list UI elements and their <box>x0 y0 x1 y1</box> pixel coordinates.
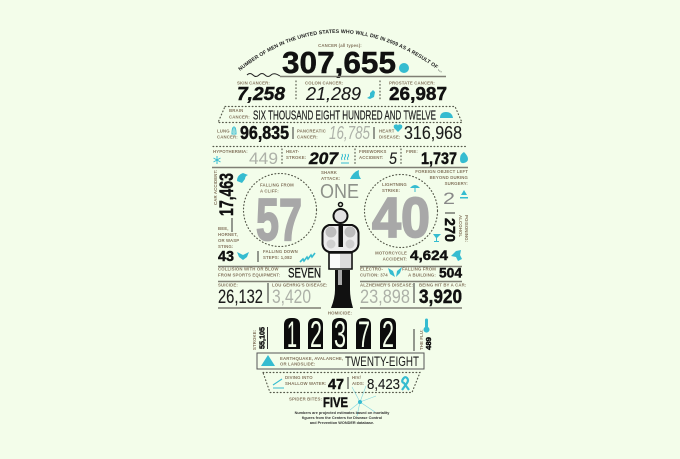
hypothermia, heat-stroke, fireworks, fire row: STROKE: <box>286 155 307 160</box>
suicide and Lou Gehrig's <box>218 282 328 308</box>
electrocution and falling from a building: ELECTRO- <box>360 266 384 272</box>
earthquake panel: TWENTY-EIGHT <box>345 353 419 369</box>
lung, pancreatic, heart row: 96,835 <box>240 123 289 143</box>
cancer types row: 21,289 <box>305 84 361 104</box>
lung, pancreatic, heart row: CANCER: <box>217 134 238 140</box>
foreign object left during surgery: FOREIGN OBJECT LEFT <box>415 169 468 174</box>
hypothermia, heat-stroke, fireworks, fire row: ACCIDENT: <box>359 155 384 160</box>
circle: lightning strike: 40 <box>372 186 430 250</box>
car accident <box>213 169 248 232</box>
alcohol poisoning: POISONING: <box>464 215 469 243</box>
foreign object left during surgery: BEYOND DURING <box>430 175 469 180</box>
source note: figures from the Centers for Disease Control <box>302 416 382 420</box>
cancer total: CANCER (all types): <box>318 43 362 48</box>
lung, pancreatic, heart row <box>213 123 467 146</box>
spider bites: FIVE <box>323 395 348 410</box>
hypothermia, heat-stroke, fireworks, fire row: 449 <box>249 149 278 168</box>
lung, pancreatic, heart row: 16,785 <box>329 123 371 143</box>
alcohol poisoning <box>433 213 469 243</box>
stroke: 55,105 <box>258 327 266 349</box>
circle: falling from a cliff: FALLING FROM <box>260 182 294 188</box>
motorcycle accident: ACCIDENT: <box>383 256 407 262</box>
source note: and Prevention WONDER database. <box>310 421 374 425</box>
lung, pancreatic, heart row: 316,968 <box>404 123 462 143</box>
foreign object left during surgery: SURGERY: <box>445 181 468 186</box>
cancer types row: PROSTATE CANCER: <box>389 80 435 86</box>
lung, pancreatic, heart row: PANCREATIC <box>297 128 326 134</box>
suicide and Lou Gehrig's: 3,420 <box>272 287 311 308</box>
diving, HIV band: DIVING INTO <box>285 375 313 380</box>
revolver <box>322 202 358 308</box>
circle: lightning strike: LIGHTNING <box>382 182 407 187</box>
cancer total <box>247 43 446 80</box>
source note: Numbers are projected estimates based on mortality <box>295 411 390 415</box>
the flu: THE FLU: <box>419 329 424 350</box>
hypothermia, heat-stroke, fireworks, fire row <box>212 149 468 168</box>
source note <box>295 411 390 425</box>
homicide counter: HOMICIDE: <box>328 310 353 316</box>
shark attack: SHARK <box>321 170 338 175</box>
diving, HIV band: HIV/ <box>352 375 362 380</box>
car accident: CAR ACCIDENT: <box>213 169 218 205</box>
electrocution and falling from a building: CUTION: 374 <box>360 272 388 278</box>
hypothermia, heat-stroke, fireworks, fire row: 1,737 <box>421 149 457 168</box>
circle: falling from a cliff: 57 <box>256 187 302 253</box>
electrocution and falling from a building: FALLING FROM <box>402 266 436 272</box>
alcohol poisoning: 270 <box>441 218 458 242</box>
suicide and Lou Gehrig's: 26,132 <box>218 287 263 308</box>
brain cancer band: CANCER: <box>229 114 250 120</box>
falling down steps: FALLING DOWN <box>263 249 298 254</box>
diving, HIV band: 8,423 <box>367 376 400 393</box>
earthquake panel <box>257 353 424 369</box>
falling down steps <box>258 249 315 262</box>
diving, HIV band: AIDS: <box>352 381 365 386</box>
alcohol poisoning: ALCOHOL <box>458 215 463 237</box>
earthquake panel: OR LANDSLIDE: <box>280 362 316 366</box>
sports collision: FROM SPORTS EQUIPMENT: <box>218 272 281 278</box>
foreign object left during surgery: 2 <box>443 189 455 208</box>
diving, HIV band: 47 <box>328 376 344 393</box>
spider bites: SPIDER BITES: <box>289 396 323 402</box>
homicide counter: 3 <box>334 314 346 355</box>
electrocution and falling from a building: 504 <box>439 264 462 280</box>
the flu <box>414 318 433 351</box>
bee stings: STING: <box>218 244 234 249</box>
brain cancer band: SIX THOUSAND EIGHT HUNDRED AND TWELVE <box>253 108 436 122</box>
bee stings: OR WASP <box>218 238 239 243</box>
Alzheimer's and being hit by a car <box>360 282 467 308</box>
suicide and Lou Gehrig's: LOU GEHRIG'S DISEASE: <box>272 282 328 288</box>
electrocution and falling from a building: A BUILDING: <box>408 272 436 278</box>
hypothermia, heat-stroke, fireworks, fire row: HEAT- <box>286 149 300 154</box>
Alzheimer's and being hit by a car: 23,898 <box>360 287 410 308</box>
hypothermia, heat-stroke, fireworks, fire row: 5 <box>389 149 397 168</box>
diving, HIV band: SHALLOW WATER: <box>285 381 327 386</box>
cancer types row: SKIN CANCER: <box>237 80 270 86</box>
Alzheimer's and being hit by a car: BEING HIT BY A CAR: <box>419 282 467 288</box>
earthquake panel: EARTHQUAKE, AVALANCHE, <box>280 356 343 361</box>
electrocution and falling from a building <box>360 264 462 282</box>
cancer types row: 7,258 <box>237 84 285 104</box>
the flu: 489 <box>424 337 433 350</box>
stroke: STROKE: <box>252 329 257 350</box>
brain cancer band <box>218 106 462 122</box>
cancer types row: 26,987 <box>389 84 447 104</box>
bee stings: HORNET, <box>218 232 238 237</box>
Alzheimer's and being hit by a car: 3,920 <box>419 287 462 308</box>
suicide and Lou Gehrig's: SUICIDE: <box>218 282 238 288</box>
motorcycle accident <box>375 247 462 263</box>
diving, HIV band <box>263 372 420 393</box>
shark attack: ONE <box>320 181 359 203</box>
homicide counter: 2 <box>310 314 322 355</box>
homicide counter <box>284 310 396 355</box>
hypothermia, heat-stroke, fireworks, fire row: HYPOTHERMIA: <box>213 149 248 154</box>
lung, pancreatic, heart row: CANCER: <box>297 134 318 140</box>
homicide counter: 2 <box>382 314 394 355</box>
stroke <box>252 327 268 350</box>
hypothermia, heat-stroke, fireworks, fire row: 207 <box>308 149 340 168</box>
circle: falling from a cliff <box>244 174 316 253</box>
curved headline: NUMBER OF MEN IN THE UNITED STATES WHO WILL DIE IN 2009 AS A RESULT OF ... <box>238 29 442 72</box>
homicide counter: 7 <box>358 314 370 355</box>
sports collision <box>218 264 321 282</box>
circle: falling from a cliff: A CLIFF: <box>260 188 279 194</box>
bee stings: BEE, <box>218 226 229 231</box>
shark attack <box>320 170 361 203</box>
spider bites <box>289 386 376 416</box>
lung, pancreatic, heart row: DISEASE: <box>379 134 401 140</box>
cancer total: 307,655 <box>282 45 396 80</box>
bee stings <box>218 226 249 265</box>
brain cancer band: BRAIN <box>229 108 243 113</box>
foreign object left during surgery <box>415 169 469 208</box>
hypothermia, heat-stroke, fireworks, fire row: FIRE: <box>406 149 418 154</box>
cancer types row: COLON CANCER: <box>305 80 344 86</box>
shark attack: ATTACK: <box>321 176 341 181</box>
homicide counter: 1 <box>287 314 297 355</box>
motorcycle accident: MOTORCYCLE <box>375 250 407 256</box>
sports collision: SEVEN <box>288 264 321 280</box>
falling down steps: STEPS: 1,082 <box>263 255 293 260</box>
Alzheimer's and being hit by a car: ALZHEIMER'S DISEASE: <box>360 282 414 288</box>
sports collision: COLLISION WITH OR BLOW <box>218 266 279 272</box>
hypothermia, heat-stroke, fireworks, fire row: FIREWORKS <box>359 149 387 154</box>
lung, pancreatic, heart row: LUNG <box>217 128 230 134</box>
bee stings: 43 <box>218 248 234 265</box>
circle: lightning strike: STRIKE: <box>382 188 401 193</box>
lung, pancreatic, heart row: HEART <box>379 128 395 134</box>
car accident: 17,463 <box>217 173 238 216</box>
cancer types row <box>237 80 447 104</box>
motorcycle accident: 4,624 <box>410 247 448 263</box>
